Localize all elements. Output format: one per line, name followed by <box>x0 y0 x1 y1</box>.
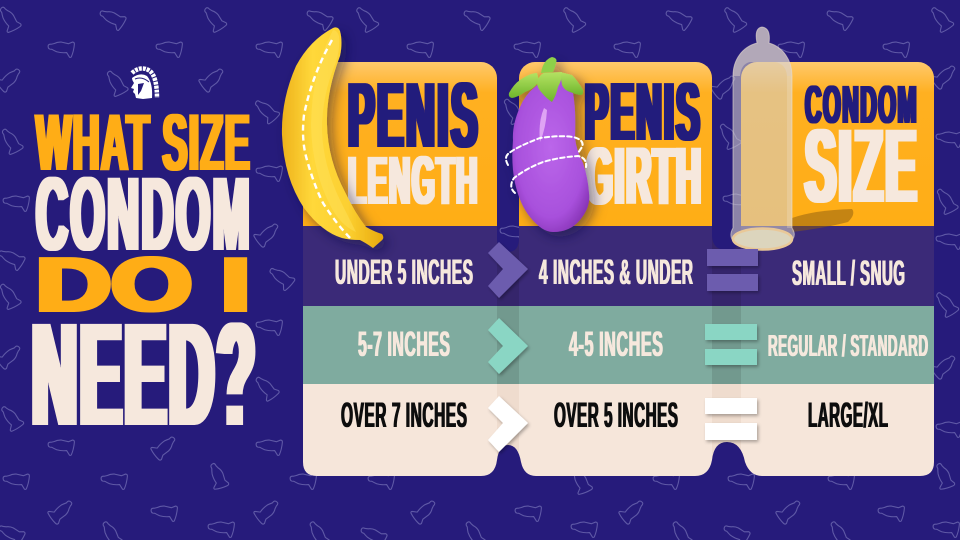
eggplant left leaf <box>509 73 539 98</box>
title line: do i: DO I <box>36 244 250 328</box>
text: OVER 7 INCHES <box>341 396 468 435</box>
row text: length column: 5-7 INCHES <box>358 325 450 364</box>
arrow: purple chevron <box>488 242 528 298</box>
logo: spartan helmet <box>131 68 157 99</box>
icon: condom shadow <box>792 209 853 232</box>
row text: girth column: 4-5 INCHES <box>569 325 664 364</box>
row text: condom size column <box>768 254 928 435</box>
text: PENIS <box>585 65 702 158</box>
icon: banana <box>282 27 383 248</box>
text: 4 INCHES & UNDER <box>539 253 694 292</box>
text: LENGTH <box>348 143 479 219</box>
condom rim <box>733 228 792 250</box>
equals: purple <box>707 249 758 291</box>
text: CONDOM <box>36 156 252 273</box>
text: GIRTH <box>586 131 703 222</box>
heading: condom size <box>805 75 919 225</box>
heading: penis girth <box>585 65 703 222</box>
text: PENIS <box>348 63 480 167</box>
arrow: teal chevron <box>488 318 528 374</box>
text: WHAT SIZE <box>36 98 251 188</box>
banana dashed measure line <box>303 40 350 238</box>
icon: condom <box>731 27 794 250</box>
text: OVER 5 INCHES <box>554 396 678 435</box>
text: NEED? <box>32 293 258 457</box>
eggplant stem <box>541 57 556 73</box>
title <box>32 98 258 457</box>
arrow: white chevron <box>488 396 528 452</box>
row text: girth column <box>539 253 694 435</box>
panel: table rows <box>303 226 934 476</box>
equals: teal <box>705 324 757 365</box>
row text: length column <box>335 253 474 435</box>
equals: white <box>705 398 757 440</box>
panel: orange column headers <box>303 62 934 242</box>
eggplant dashed rings <box>506 136 586 193</box>
icon: eggplant <box>506 57 589 232</box>
eggplant right leaf <box>560 72 583 95</box>
eggplant centre leaf <box>537 72 562 102</box>
heading: penis length <box>348 63 480 219</box>
text: UNDER 5 INCHES <box>335 253 474 292</box>
